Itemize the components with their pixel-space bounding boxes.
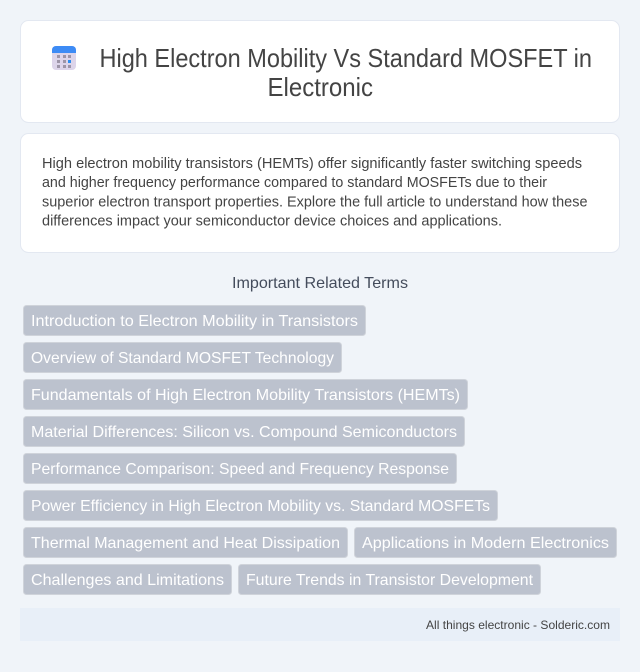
chip: power efficiency: Power Efficiency in High Electron Mobility vs. Standard MOSFETs — [31, 498, 490, 515]
title: High Electron Mobility Vs Standard MOSFET in — [100, 45, 592, 73]
chip: introduction — [24, 306, 366, 336]
summary text: and higher frequency performance compared to standard MOSFETs due to their — [42, 175, 547, 191]
chip: applications — [354, 528, 616, 558]
chip: overview: Overview of Standard MOSFET Technology — [31, 350, 334, 367]
heading: related terms: Important Related Terms — [232, 275, 408, 292]
chip: future trends — [238, 564, 540, 594]
title: Electronic — [268, 74, 373, 102]
footer bar — [20, 608, 620, 641]
chip: fundamentals: Fundamentals of High Electron Mobility Transistors (HEMTs) — [31, 387, 460, 404]
chip: performance comparison: Performance Comparison: Speed and Frequency Response — [31, 461, 449, 478]
chip: material differences: Material Differences: Silicon vs. Compound Semiconductors — [31, 424, 457, 441]
footer credit: All things electronic - Solderic.com — [426, 618, 610, 632]
chip: challenges: Challenges and Limitations — [31, 572, 224, 589]
chip: performance comparison — [24, 454, 456, 484]
chip: power efficiency — [24, 490, 498, 520]
summary text: differences impact your semiconductor device choices and applications. — [42, 214, 502, 230]
chip: introduction: Introduction to Electron Mobility in Transistors — [31, 313, 358, 330]
summary text: superior electron transport properties. Explore the full article to understand how these — [42, 194, 588, 210]
chip: applications: Applications in Modern Electronics — [362, 535, 609, 552]
chip: future trends: Future Trends in Transistor Development — [246, 572, 534, 589]
chip: challenges — [24, 564, 232, 594]
chip: fundamentals — [24, 380, 468, 410]
icon: chip calendar — [52, 46, 76, 70]
chip: thermal management — [24, 528, 348, 558]
panel: summary card — [20, 134, 620, 252]
chip: material differences — [24, 416, 464, 446]
panel: title card — [20, 20, 620, 122]
chip: thermal management: Thermal Management and Heat Dissipation — [31, 535, 340, 552]
summary text: High electron mobility transistors (HEMTs) offer significantly faster switching speeds — [42, 156, 582, 172]
chip: overview — [24, 342, 342, 372]
